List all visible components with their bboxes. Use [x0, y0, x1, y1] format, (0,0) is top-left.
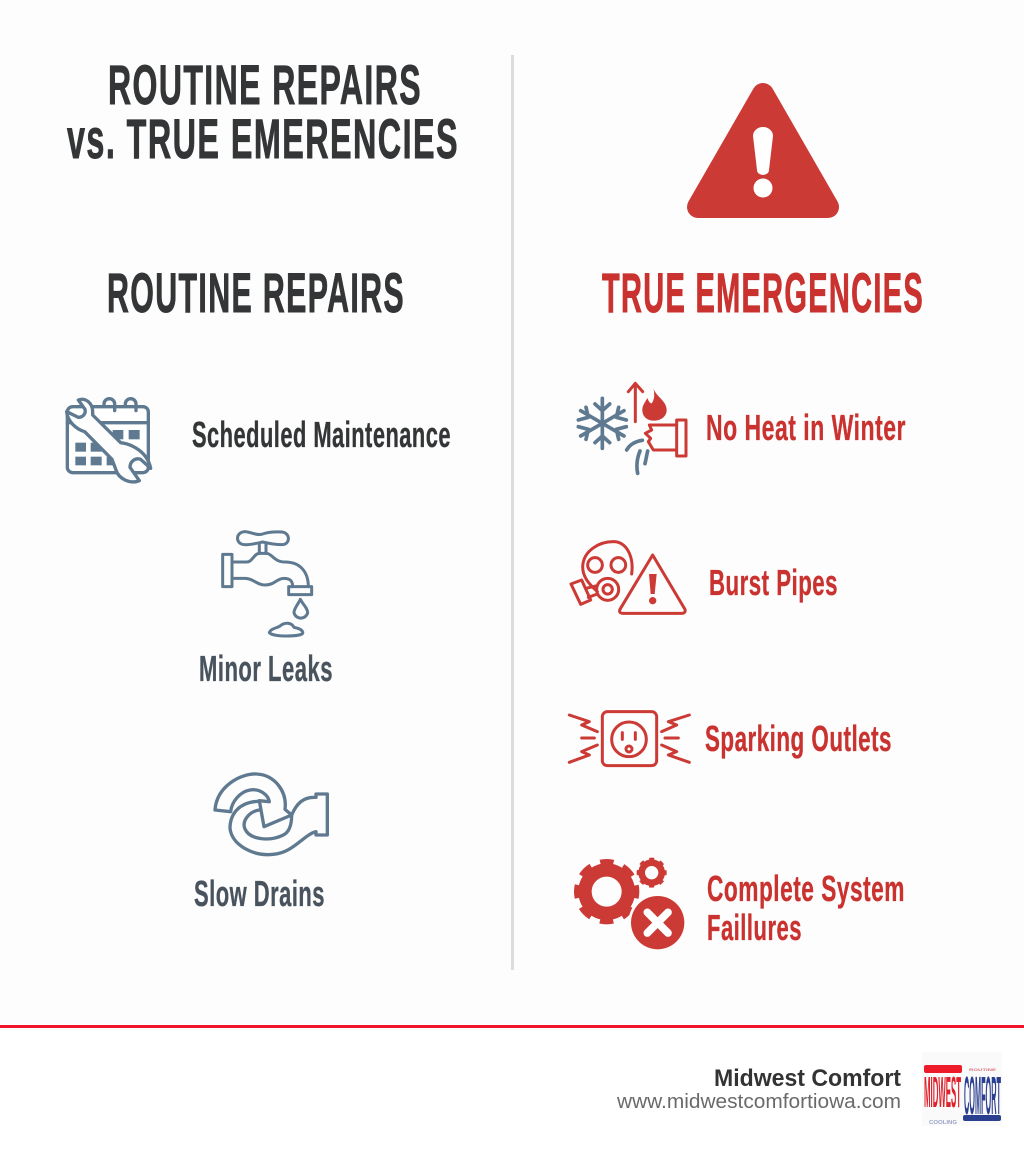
footer rule — [0, 1025, 1024, 1028]
icon: gas mask and warning — [571, 542, 685, 613]
title: vs. TRUE EMERENCIES — [67, 107, 459, 170]
label: complete system failures: Complete System — [707, 868, 905, 909]
label: no heat in winter: No Heat in Winter — [706, 407, 906, 448]
label: scheduled maintenance: Scheduled Maintenance — [192, 414, 451, 455]
snowflake — [578, 398, 626, 448]
logo: ROUTINE — [969, 1067, 996, 1072]
label: complete system failures — [707, 868, 905, 948]
icon: warning triangle — [698, 94, 828, 207]
label: burst pipes: Burst Pipes — [709, 562, 838, 603]
icon: dripping faucet — [223, 532, 312, 636]
label: sparking outlets: Sparking Outlets — [705, 718, 892, 759]
footer brand text — [616, 1065, 901, 1113]
logo: MIDWEST — [924, 1067, 961, 1117]
footer brand text: Midwest Comfort — [714, 1065, 901, 1092]
label: minor leaks: Minor Leaks — [199, 648, 333, 689]
label: slow drains: Slow Drains — [194, 873, 325, 914]
icon: freezing and burst pipe — [578, 383, 686, 473]
icon: drain pipe — [215, 774, 327, 855]
footer brand text: www.midwestcomfortiowa.com — [616, 1091, 901, 1113]
icon: sparking outlet — [569, 712, 689, 766]
heading: routine repairs: ROUTINE REPAIRS — [107, 261, 405, 324]
logo: COMFORT — [964, 1067, 1001, 1127]
logo — [922, 1052, 1002, 1127]
logo: COOLING — [929, 1120, 957, 1126]
icon: calendar and wrench — [67, 399, 151, 482]
label: complete system failures: Faillures — [707, 907, 802, 948]
title: ROUTINE REPAIRS — [108, 53, 422, 116]
icon: failed gears — [577, 859, 687, 952]
title — [67, 53, 459, 170]
